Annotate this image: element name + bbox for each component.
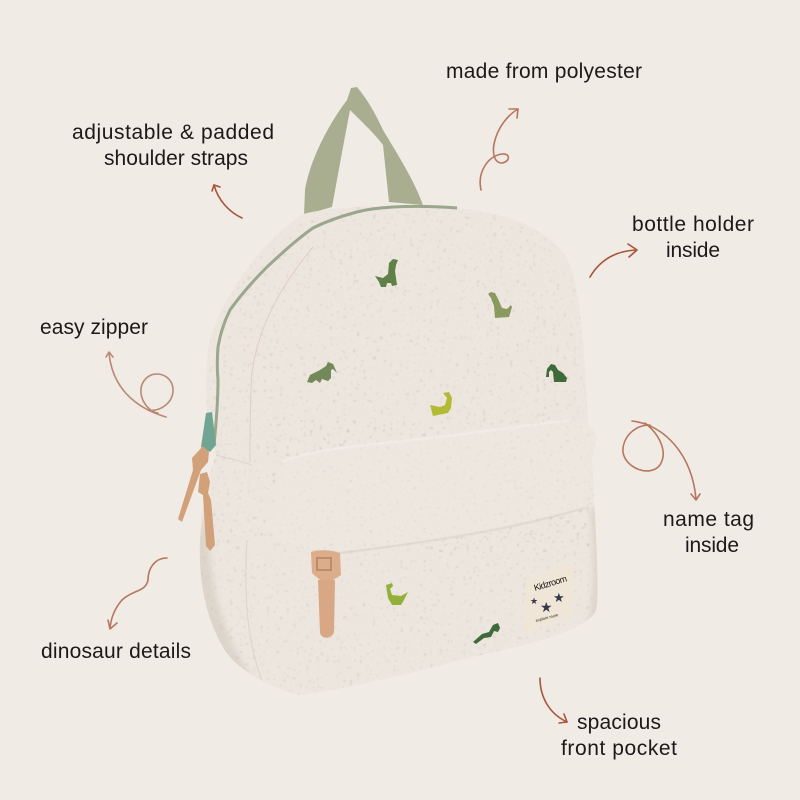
arrow: easy zipper bbox=[106, 352, 173, 417]
arrow: dinosaur details bbox=[108, 558, 167, 629]
flap lower edge shadow bbox=[313, 508, 585, 553]
label: name tag bbox=[663, 508, 754, 557]
pocket flap top highlight bbox=[283, 420, 570, 462]
backpack photo illustration bbox=[178, 87, 610, 700]
label: name tag: name tag bbox=[663, 508, 754, 531]
pocket speckle bbox=[284, 425, 589, 548]
label: shoulder straps bbox=[72, 121, 274, 170]
dinosaur embroidery bbox=[307, 259, 567, 644]
arrow: polyester bbox=[480, 109, 518, 190]
brand label: ★ bbox=[540, 599, 553, 615]
label: front pocket: front pocket bbox=[561, 737, 677, 760]
brand label bbox=[522, 562, 574, 635]
brand label: Kidzroom bbox=[533, 573, 568, 593]
zipper tape bbox=[214, 206, 457, 445]
front pocket flap bbox=[273, 420, 597, 552]
label: bottle holder bbox=[632, 213, 754, 262]
pocket zipper pull bbox=[311, 550, 341, 638]
label: bottle holder: inside bbox=[666, 239, 720, 262]
label: bottle holder: bottle holder bbox=[632, 213, 754, 236]
label: shoulder straps: adjustable & padded bbox=[72, 121, 274, 144]
brand label: explore more bbox=[535, 612, 560, 623]
brand label: ★ bbox=[530, 596, 538, 606]
label: shoulder straps: shoulder straps bbox=[104, 147, 248, 170]
label: easy zipper: easy zipper bbox=[40, 316, 148, 339]
label: dinosaur details: dinosaur details bbox=[41, 640, 191, 663]
label: polyester: made from polyester bbox=[446, 60, 642, 83]
side pocket edge bbox=[216, 455, 252, 465]
handle strap bbox=[304, 87, 423, 215]
arrow: shoulder straps bbox=[212, 185, 242, 218]
main zipper pull bbox=[178, 412, 216, 551]
label: front pocket bbox=[561, 711, 677, 760]
fabric shading and speckle bbox=[190, 200, 610, 700]
arrow: front pocket bbox=[540, 678, 567, 723]
infographic canvas bbox=[40, 62, 754, 760]
label: front pocket: spacious bbox=[577, 711, 661, 734]
arrow: bottle holder bbox=[590, 244, 637, 277]
side seams bbox=[250, 247, 313, 462]
brand label: ★ bbox=[553, 590, 565, 605]
label: name tag: inside bbox=[685, 534, 739, 557]
arrow: name tag bbox=[623, 421, 700, 500]
backpack body bbox=[200, 206, 597, 695]
